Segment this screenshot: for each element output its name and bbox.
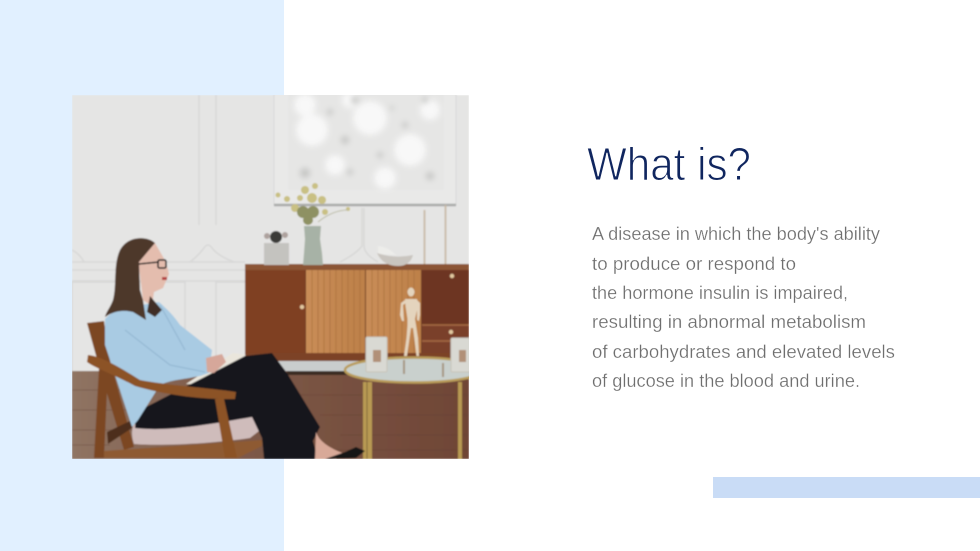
chair armrest and front leg xyxy=(87,355,237,458)
chair back and rear legs xyxy=(87,321,134,458)
seat rail xyxy=(104,440,262,458)
body text block: to produce or respond to xyxy=(592,253,796,274)
trousers xyxy=(135,353,320,459)
body text block: A disease in which the body's ability xyxy=(592,223,881,244)
hair xyxy=(105,238,155,320)
woman xyxy=(105,238,320,459)
photo: woman seated with notebook in a room xyxy=(72,90,483,459)
foot and shoe xyxy=(315,432,365,459)
body text block xyxy=(592,223,895,391)
hand xyxy=(206,354,226,373)
small pot with dark flowers xyxy=(264,231,289,265)
wall mouldings xyxy=(72,95,378,372)
shirt xyxy=(105,302,212,427)
panel: left light blue background xyxy=(0,0,284,551)
lips xyxy=(162,277,167,280)
cushion xyxy=(132,416,259,445)
glasses xyxy=(139,260,166,268)
title: What is? xyxy=(587,138,751,190)
glass side table xyxy=(345,358,483,459)
floor xyxy=(72,371,469,459)
wooden mannequin xyxy=(400,288,420,356)
wall xyxy=(72,95,469,375)
body text block: of carbohydrates and elevated levels xyxy=(592,341,895,362)
body text block: of glucose in the blood and urine. xyxy=(592,370,860,391)
cabinet xyxy=(245,264,469,372)
accent bar: bottom right xyxy=(713,477,980,498)
candlesticks xyxy=(424,205,446,264)
body text block: the hormone insulin is impaired, xyxy=(592,282,848,303)
flower vase xyxy=(276,183,350,265)
body text block: resulting in abnormal metabolism xyxy=(592,311,866,332)
notebook xyxy=(186,353,246,384)
collar shadow xyxy=(147,296,162,317)
framed cloud painting xyxy=(274,90,456,205)
water glasses xyxy=(366,337,471,372)
bowl xyxy=(377,253,413,268)
neck and face xyxy=(138,243,169,306)
